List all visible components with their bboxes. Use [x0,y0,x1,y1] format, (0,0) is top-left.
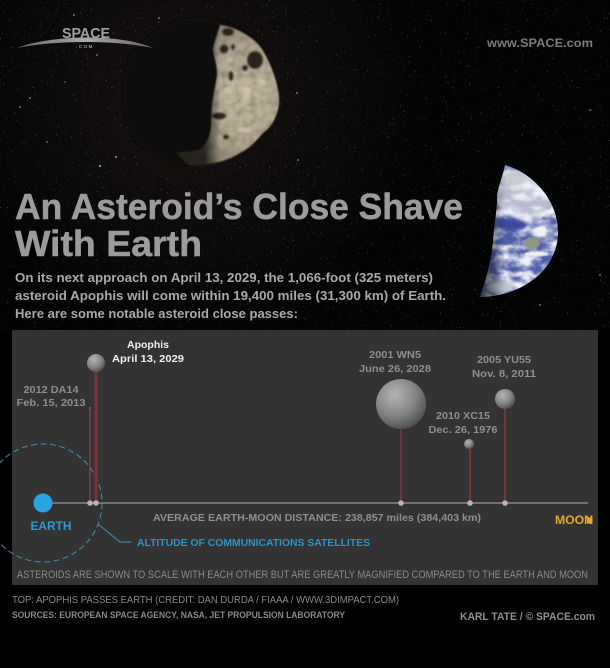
asteroid: 2012 DA14: Feb. 15, 2013 [16,397,86,409]
label: Moon: MOON [555,515,593,527]
starfield photo background [0,0,610,330]
icon: Earth dot [34,494,52,512]
intro text [15,271,446,321]
asteroid Apophis [123,15,285,170]
asteroid: 2012 DA14: 2012 DA14 [24,384,79,396]
title: With Earth [15,223,202,264]
byline: KARL TATE / © SPACE.com [460,611,595,623]
asteroid: 2010 XC15: Dec. 26, 1976 [428,424,498,436]
panel: close-pass chart [0,330,598,585]
asteroid: Apophis: Apophis [127,339,169,351]
satellite leader line [98,524,131,542]
asteroid: 2010 XC15: 2010 XC15 [436,410,490,422]
asteroid: 2005 YU55: Nov. 8, 2011 [472,368,536,380]
baseline: Earth-Moon distance [43,502,588,504]
intro text: On its next approach on April 13, 2029, the 1,066-foot (325 meters) [15,271,433,285]
title [15,186,463,264]
asteroid: 2010 XC15 [428,410,498,506]
asteroid: Apophis [87,339,184,506]
intro text: Here are some notable asteroid close passes: [15,307,298,321]
label: satellite altitude: ALTITUDE OF COMMUNICATIONS SATELLITES [137,537,370,549]
asteroid: 2001 WN5: June 26, 2028 [359,363,431,375]
asteroid: 2012 DA14 [16,384,93,506]
logo: SPACE.com: .COM [76,44,94,49]
title: An Asteroid’s Close Shave [15,186,463,227]
image credit: TOP: APOPHIS PASSES EARTH (CREDIT: DAN DURDA / FIAAA / WWW.3DIMPACT.COM) [12,594,399,606]
website url: www.SPACE.com [486,38,593,50]
intro text: asteroid Apophis will come within 19,400 miles (31,300 km) of Earth. [15,289,446,303]
asteroid: Apophis: April 13, 2029 [112,353,184,365]
satellite altitude ring [0,444,102,562]
asteroid: 2001 WN5 [359,349,431,506]
asteroid: 2005 YU55 [472,354,536,506]
label: Earth: EARTH [30,519,72,533]
sources: SOURCES: EUROPEAN SPACE AGENCY, NASA, JET PROPULSION LABORATORY [12,610,346,621]
logo: SPACE.com [17,25,153,49]
asteroid: 2005 YU55: 2005 YU55 [477,354,531,366]
logo: SPACE.com: SPACE [62,25,110,42]
Earth [480,165,558,297]
asteroid: 2001 WN5: 2001 WN5 [369,349,421,361]
distance label: AVERAGE EARTH-MOON DISTANCE: 238,857 miles (384,403 km) [153,512,481,524]
